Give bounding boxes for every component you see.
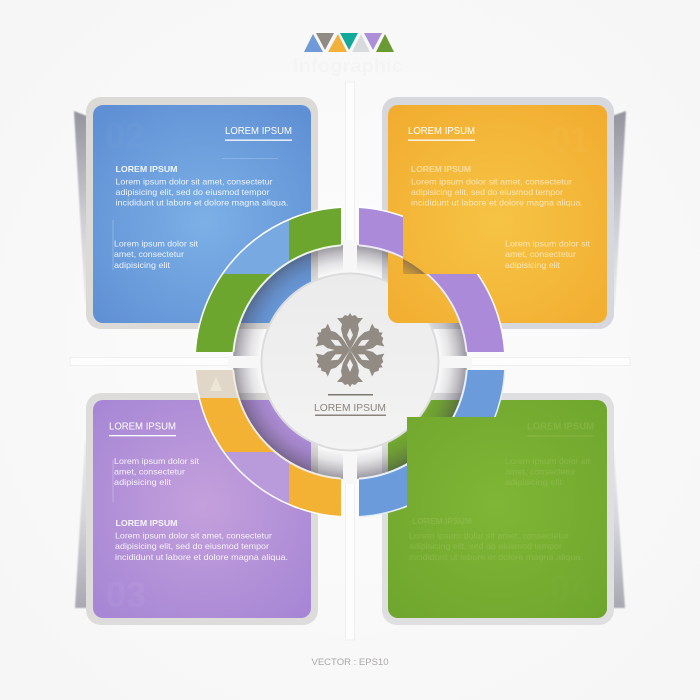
- text block: blue card: incididunt ut labore et dolore magna aliqua.: [116, 198, 288, 208]
- green overlay patch: [407, 417, 607, 618]
- text block: orange card: Lorem ipsum dolor sit: [505, 238, 591, 248]
- text block: blue card: adipisicing elit, sed do eiusmod tempor: [116, 187, 270, 197]
- text block: purple card: adipisicing elit: [114, 477, 172, 487]
- side shadow: green: [612, 450, 625, 608]
- center label: LOREM IPSUM: [314, 402, 386, 414]
- text block: blue card: LOREM IPSUM: [225, 126, 292, 137]
- text block: green card: LOREM IPSUM: [412, 516, 472, 526]
- panel: orange card: [382, 97, 614, 329]
- text block: blue card: [105, 115, 292, 270]
- icon: flower emblem: [311, 313, 389, 387]
- text block: blue card: Lorem ipsum dolor sit amet, consectetur: [116, 176, 273, 186]
- text block: orange card: LOREM IPSUM: [411, 164, 471, 174]
- icon: bell on tan segment: [210, 377, 222, 391]
- horizontal divider: [70, 358, 630, 366]
- text block: green card: [409, 422, 594, 608]
- footer label: VECTOR : EPS10: [312, 657, 388, 668]
- text block: green card: 04: [550, 567, 590, 608]
- inner ring shadow: [233, 245, 467, 479]
- text block: orange card: [408, 119, 591, 270]
- vertical divider: [346, 82, 354, 640]
- text block: blue card: LOREM IPSUM: [116, 164, 178, 174]
- ring segment: top right: [359, 208, 504, 352]
- text block: purple card: LOREM IPSUM: [116, 518, 178, 528]
- text block: green card: Lorem ipsum dolor sit amet, consectetur: [409, 530, 569, 540]
- text block: green card: adipisicing elit, sed do eiusmod tempor: [409, 541, 562, 551]
- text block: green card: Lorem ipsum dolor sit: [505, 456, 591, 466]
- divider strips through inner ring: [228, 240, 472, 484]
- text block: purple card: LOREM IPSUM: [109, 422, 176, 432]
- text block: blue card: 02: [105, 115, 145, 156]
- side shadow: purple: [75, 440, 87, 608]
- text block: orange card: Lorem ipsum dolor sit amet, consectetur: [411, 176, 572, 186]
- ring segment: top left: [196, 208, 341, 352]
- text block: orange card: incididunt ut labore et dolore magna aliqua.: [411, 198, 583, 208]
- text block: green card: adipisicing elit: [505, 477, 563, 487]
- text block: blue card: adipisicing elit: [114, 260, 171, 270]
- panel: purple card: [86, 393, 318, 625]
- text block: purple card: [106, 422, 288, 615]
- center disc: [260, 272, 440, 452]
- text block: purple card: Lorem ipsum dolor sit: [114, 456, 200, 466]
- panel: green card: [382, 393, 614, 625]
- text block: purple card: 03: [106, 574, 146, 615]
- text block: green card: LOREM IPSUM: [527, 422, 594, 432]
- text block: purple card: adipisicing elit, sed do eiusmod tempor: [115, 541, 269, 551]
- text block: purple card: Lorem ipsum dolor sit amet, consectetur: [115, 530, 272, 540]
- logo triangles: [304, 33, 394, 52]
- text block: purple card: incididunt ut labore et dolore magna aliqua.: [115, 552, 288, 562]
- side shadow: orange: [612, 111, 626, 305]
- text block: green card: amet, consectetur: [505, 466, 576, 476]
- text block: blue card: Lorem ipsum dolor sit: [114, 238, 199, 248]
- text block: blue card: amet, consectetur: [114, 249, 184, 259]
- inner zone base: [233, 245, 467, 479]
- text block: green card: incididunt ut labore et dolore magna aliqua.: [409, 552, 583, 562]
- text block: purple card: amet, consectetur: [114, 466, 185, 476]
- side shadow: blue: [74, 111, 87, 302]
- faint infographic heading: Infographic: [293, 56, 403, 76]
- text block: orange card: adipisicing elit, sed do eiusmod tempor: [411, 187, 563, 197]
- ring segment: bottom right: [359, 370, 506, 518]
- center label: [314, 394, 386, 416]
- text block: orange card: adipisicing elit: [505, 260, 561, 270]
- text block: orange card: 01: [550, 119, 590, 160]
- panel: blue card: [86, 97, 318, 329]
- text block: orange card: amet, consectetur: [505, 249, 576, 259]
- ring segment: bottom left: [196, 370, 341, 516]
- orange overlay patch: [388, 105, 607, 323]
- text block: orange card: LOREM IPSUM: [408, 126, 475, 137]
